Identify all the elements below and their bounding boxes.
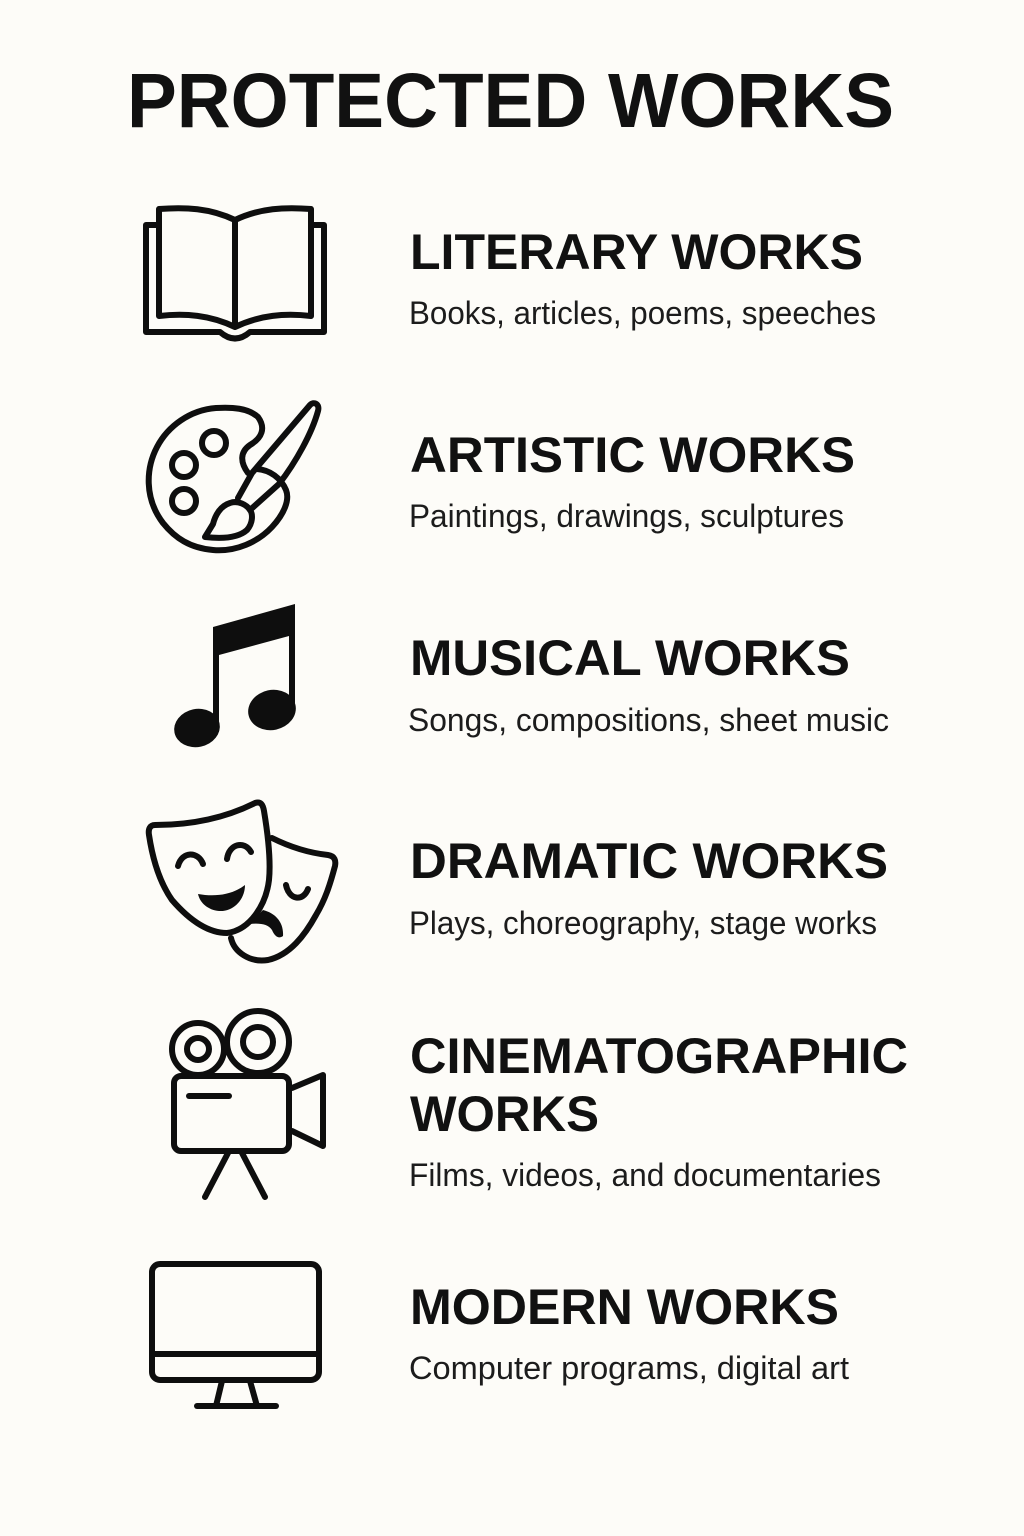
panel: literary works <box>146 208 876 338</box>
heading: modern works: MODERN WORKS <box>410 1279 839 1335</box>
description: artistic works: Paintings, drawings, sculptures <box>409 498 844 534</box>
heading: musical works: MUSICAL WORKS <box>410 630 850 686</box>
icon: palette and brush <box>149 403 318 550</box>
icon: theatre masks <box>149 802 335 960</box>
panel: cinematographic works: WORKS <box>410 1086 599 1142</box>
heading: artistic works: ARTISTIC WORKS <box>410 427 855 483</box>
panel: artistic works <box>149 403 855 550</box>
icon: music notes <box>171 604 300 751</box>
panel: cinematographic works <box>172 1011 908 1197</box>
description: dramatic works: Plays, choreography, stage works <box>409 905 877 941</box>
title: PROTECTED WORKS <box>127 58 894 144</box>
panel: dramatic works <box>149 802 888 960</box>
icon: computer monitor <box>152 1264 319 1406</box>
description: cinematographic works: Films, videos, and documentaries <box>409 1157 881 1193</box>
heading: cinematographic works: CINEMATOGRAPHIC <box>410 1028 908 1084</box>
panel: musical works <box>171 604 889 751</box>
heading: literary works: LITERARY WORKS <box>410 224 863 280</box>
icon: film camera <box>172 1011 323 1197</box>
description: modern works: Computer programs, digital art <box>409 1350 849 1386</box>
icon: open book <box>146 208 324 338</box>
description: literary works: Books, articles, poems, speeches <box>409 295 876 331</box>
description: musical works: Songs, compositions, sheet music <box>408 702 889 738</box>
panel: modern works <box>152 1264 849 1406</box>
heading: dramatic works: DRAMATIC WORKS <box>410 833 888 889</box>
